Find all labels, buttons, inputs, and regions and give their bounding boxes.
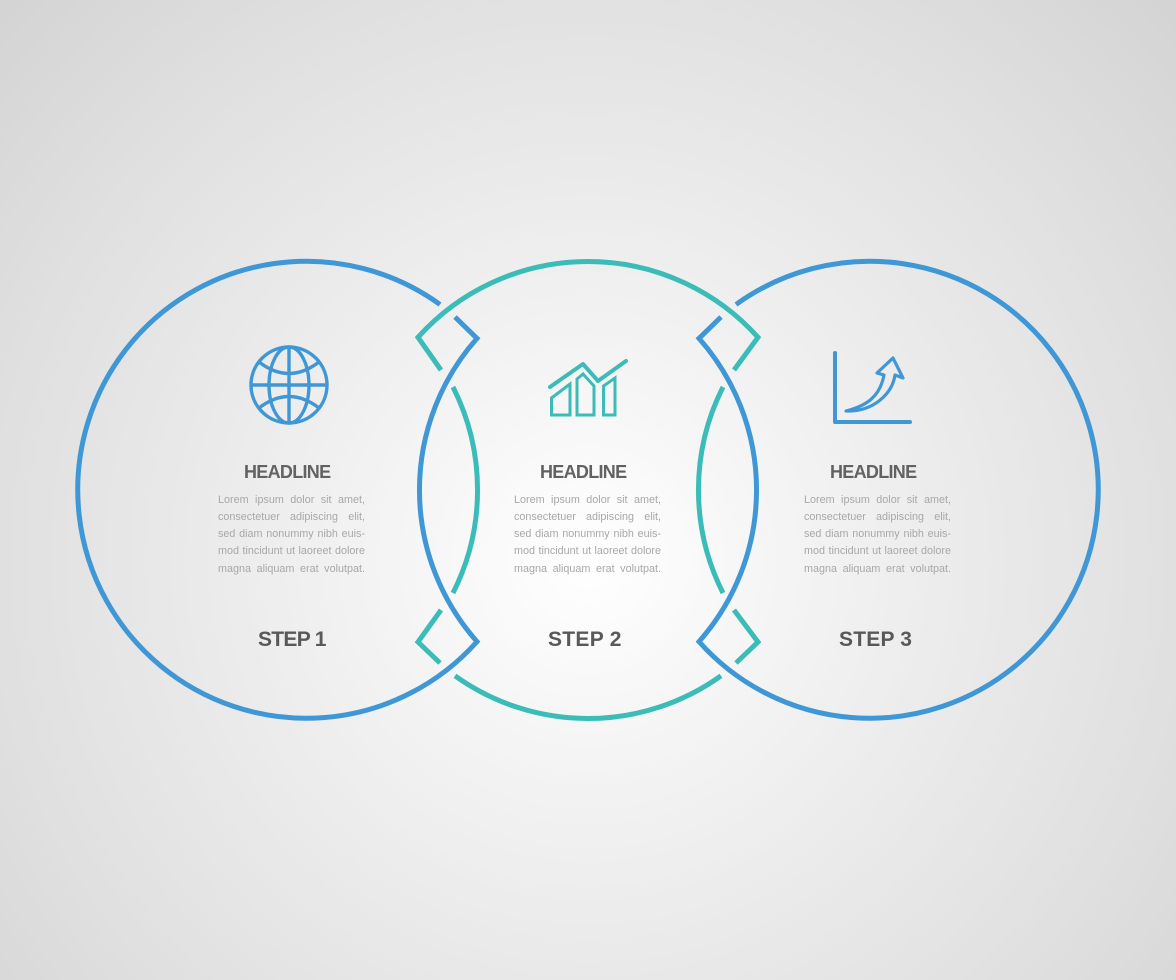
body text: sed diam nonummy nibh euis- — [804, 528, 951, 540]
body text: sed diam nonummy nibh euis- — [514, 528, 661, 540]
body text: Lorem ipsum dolor sit amet, — [514, 494, 661, 506]
panel: step 3 — [804, 351, 951, 651]
icon: globe — [249, 345, 329, 425]
step label: STEP 3 — [839, 628, 912, 651]
body text: consectetuer adipiscing elit, — [804, 511, 951, 523]
body text: sed diam nonummy nibh euis- — [218, 528, 365, 540]
body text — [218, 494, 365, 574]
body text: magna aliquam erat volutpat. — [218, 562, 365, 574]
panel: step 1 — [218, 345, 365, 651]
body text: consectetuer adipiscing elit, — [218, 511, 365, 523]
headline: HEADLINE — [244, 462, 330, 482]
body text — [514, 494, 661, 574]
body text: mod tincidunt ut laoreet dolore — [218, 545, 365, 557]
ring: step 3 blue outline — [699, 261, 1098, 718]
icon: bar chart with trend line — [548, 358, 628, 416]
body text: mod tincidunt ut laoreet dolore — [804, 545, 951, 557]
headline: HEADLINE — [540, 462, 626, 482]
step label: STEP 2 — [548, 628, 622, 651]
body text: mod tincidunt ut laoreet dolore — [514, 545, 661, 557]
ring: step 1 blue outline — [78, 261, 477, 718]
body text: consectetuer adipiscing elit, — [514, 511, 661, 523]
body text: magna aliquam erat volutpat. — [804, 562, 951, 574]
ring: step 2 teal outline — [418, 261, 758, 718]
body text: magna aliquam erat volutpat. — [514, 562, 661, 574]
body text: Lorem ipsum dolor sit amet, — [218, 494, 365, 506]
headline: HEADLINE — [830, 462, 916, 482]
body text: Lorem ipsum dolor sit amet, — [804, 494, 951, 506]
icon: growth arrow chart — [833, 351, 912, 424]
body text — [804, 494, 951, 574]
step label: STEP 1 — [258, 628, 326, 651]
panel: step 2 — [514, 358, 661, 651]
